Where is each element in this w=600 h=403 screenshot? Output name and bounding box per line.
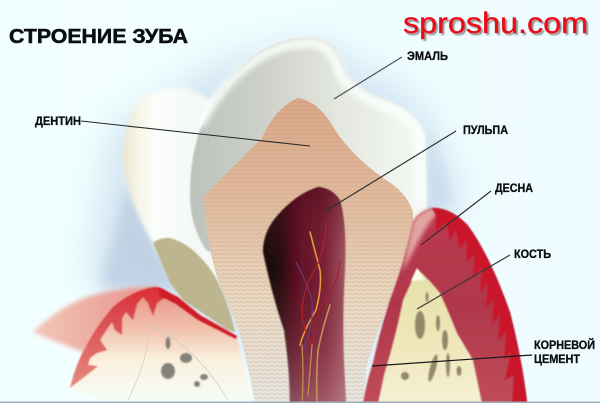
label: dentin: ДЕНТИН	[35, 116, 81, 128]
right bone holes	[401, 292, 462, 382]
gum pale edge	[402, 208, 438, 272]
left gum back	[33, 287, 158, 352]
pulp vessels	[296, 222, 340, 403]
left gum and bone	[33, 287, 252, 403]
dentin	[204, 98, 413, 403]
label: root cementum: КОРНЕВОЙ	[534, 339, 595, 352]
back tooth root	[153, 238, 235, 332]
right gum	[363, 208, 527, 403]
left bone body	[70, 287, 252, 403]
label: gum: ДЕСНА	[495, 183, 533, 195]
bone tip	[411, 268, 425, 281]
label: pulp: ПУЛЬПА	[463, 125, 508, 137]
left bone holes	[161, 337, 208, 387]
soft blue shadow behind tooth	[85, 40, 462, 403]
watermark: sproshu.com	[403, 7, 588, 40]
right bone	[378, 269, 482, 403]
title: СТРОЕНИЕ ЗУБА	[9, 26, 188, 48]
watermark: sproshu.com	[405, 9, 590, 42]
pulp	[263, 187, 346, 403]
label: root cementum: ЦЕМЕНТ	[534, 354, 580, 366]
bottom edge line	[0, 402, 600, 403]
label: bone: КОСТЬ	[514, 249, 551, 261]
label: enamel: ЭМАЛЬ	[407, 51, 448, 63]
back tooth	[122, 87, 230, 300]
gum red serrated edge	[432, 208, 527, 403]
enamel highlight	[200, 43, 421, 200]
left bone core lines	[128, 325, 228, 400]
left gum red band with fingers	[70, 287, 170, 388]
label: root cementum	[534, 339, 595, 366]
main tooth enamel	[190, 37, 427, 290]
left gum red edge	[158, 287, 237, 339]
leader lines	[81, 57, 532, 366]
